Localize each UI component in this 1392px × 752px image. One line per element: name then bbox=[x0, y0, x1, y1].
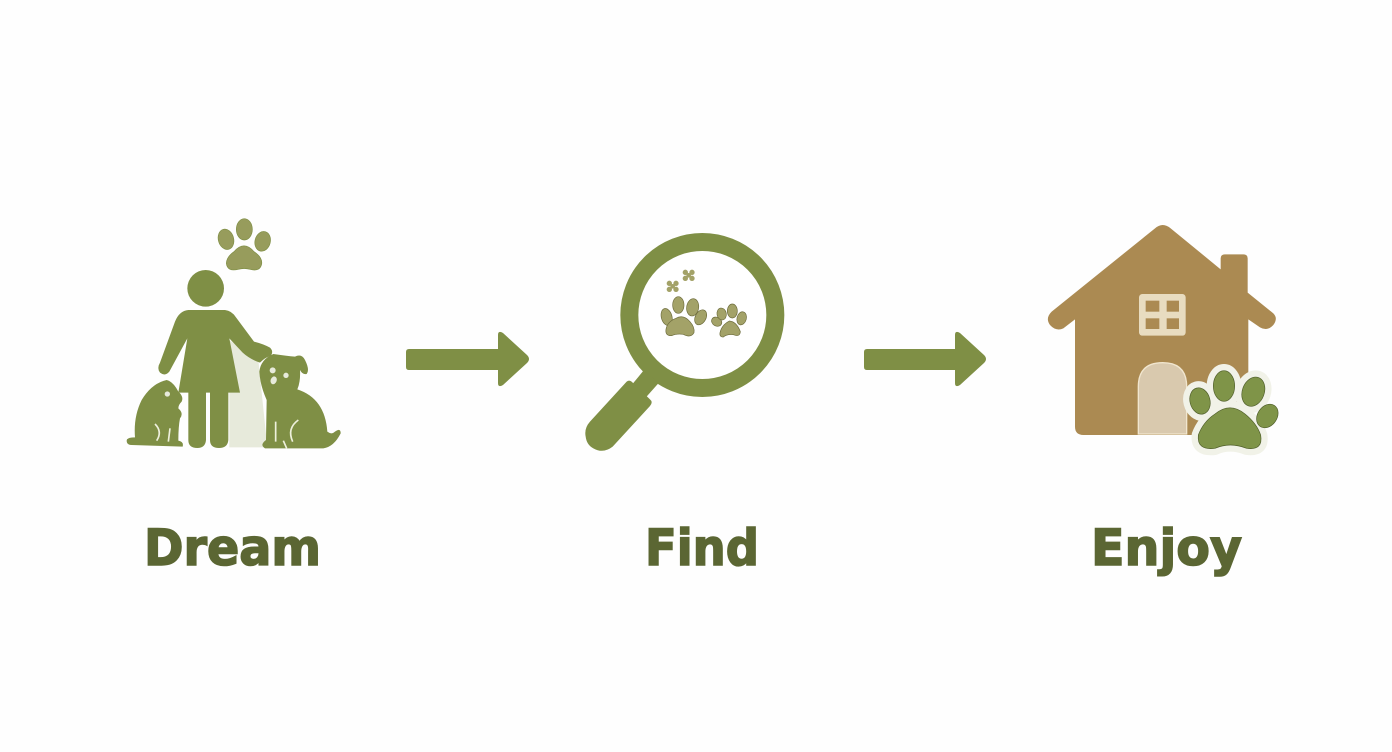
door bbox=[1138, 363, 1187, 434]
medium paw print bbox=[710, 304, 748, 337]
large paw print bbox=[659, 297, 709, 336]
pale shadow panel bbox=[229, 340, 267, 447]
icon: thought paw bbox=[216, 219, 273, 270]
magnifier handle bbox=[585, 370, 658, 451]
icon: magnifying glass with paws bbox=[585, 242, 775, 451]
house body bbox=[1048, 225, 1276, 435]
magnifier ring bbox=[629, 242, 775, 388]
arrow: dream to find bbox=[406, 332, 529, 386]
heading: Enjoy: Enjoy bbox=[1091, 519, 1242, 577]
icon: green paw bbox=[1187, 371, 1283, 449]
heading: Dream: Dream bbox=[144, 519, 321, 577]
window bbox=[1139, 294, 1186, 336]
icon: person with two dogs and paw bbox=[127, 219, 341, 448]
person figure bbox=[158, 270, 272, 448]
icon: small dog bbox=[127, 380, 183, 447]
icon: house with paw bbox=[1048, 225, 1283, 449]
heading: Find: Find bbox=[645, 519, 759, 577]
tiny paw prints bbox=[667, 270, 695, 292]
arrow: find to enjoy bbox=[864, 332, 986, 386]
icon: large dog bbox=[259, 354, 341, 448]
